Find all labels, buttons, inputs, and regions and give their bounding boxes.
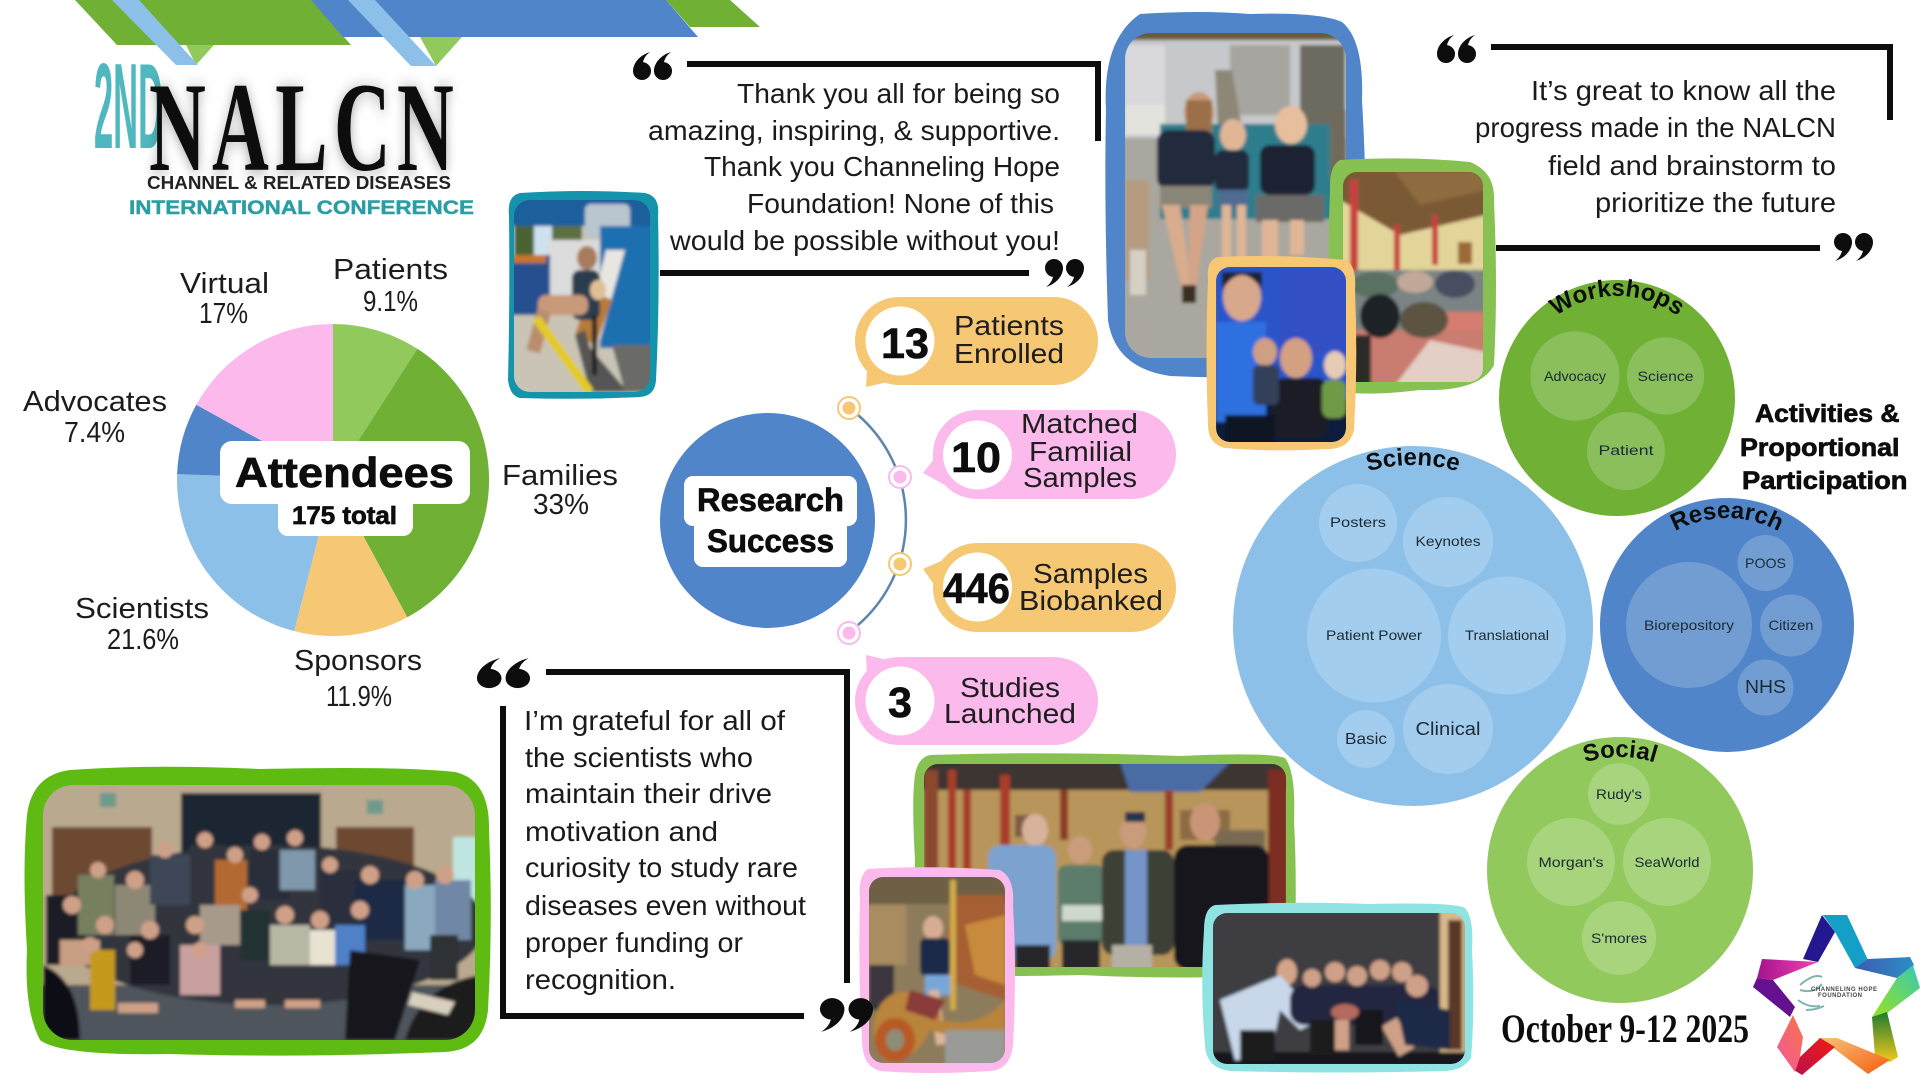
quote 3 text: proper funding or [525,927,743,958]
pie labels [23,254,618,713]
bubble: research [1600,498,1854,752]
center label: Attendees [235,449,454,496]
pie labels: Families [502,460,618,492]
photo: family at aquarium, orange frame [1206,256,1356,450]
center label: 175 total [292,502,397,530]
activities title [1740,400,1908,495]
activities title: Activities & [1755,400,1900,428]
connector arc [858,415,906,625]
science title: Science [1366,448,1459,470]
stat bubble: 10 matched familial samples: Matched [1021,408,1138,439]
research sub-bubbles: POOS [1745,555,1786,571]
quote 1 text: would be possible without you! [669,225,1060,256]
research sub-bubbles: Biorepository [1644,617,1734,633]
research sub-bubbles: Citizen [1768,617,1814,633]
photo: four scientists, green frame [913,753,1296,978]
logo: Channeling Hope Foundation star: FOUNDATION [1818,993,1862,999]
quote 3 text: I’m grateful for all of [524,705,785,736]
icon: quote 3 closing mark [820,998,873,1032]
stat bubble: 3 studies launched [855,655,1098,745]
connector nodes [837,396,912,645]
stat bubble: 13 patients enrolled [855,297,1098,387]
quote 1: thank you [633,52,1098,287]
pie labels: 17% [199,298,248,330]
photo: child in ride seat, teal frame [508,191,659,399]
quote 1 text: Thank you all for being so [737,78,1060,109]
social sub-bubbles: S'mores [1591,930,1647,946]
activities title: Proportional [1740,434,1900,462]
stat bubble: 446 samples biobanked: Biobanked [1019,585,1163,616]
quote 1 frame lines [660,64,1098,273]
science sub-bubbles: Keynotes [1416,533,1480,549]
logo wordmark: CHANNELING HOPE [1811,987,1877,993]
workshops sub-bubbles: Science [1638,368,1694,384]
science sub-bubbles: Clinical [1416,719,1480,739]
quote 3: grateful for scientists [477,658,847,1016]
photo: hands together, cyan frame [1202,903,1473,1072]
stat bubble: 13 patients enrolled: Patients [954,310,1064,341]
hub circle [660,413,875,628]
hub label [684,476,857,567]
hub label: Success [707,523,834,559]
social sub-bubbles: SeaWorld [1634,854,1700,870]
quote 3 text: the scientists who [525,742,753,773]
science sub-bubbles [1307,484,1566,774]
pie labels: 33% [533,489,589,521]
science sub-bubbles: Translational [1465,627,1549,643]
stat bubble: 13 patients enrolled: 13 [881,320,929,368]
science sub-bubbles: Basic [1345,731,1387,748]
research sub-bubbles [1626,535,1822,716]
pie labels: 7.4% [64,417,125,449]
logo: Channeling Hope Foundation star [1753,915,1920,1075]
quote 3 text: motivation and [525,816,718,847]
pie labels: Advocates [23,386,167,418]
conference logo title: 2ND [94,38,163,174]
social sub-bubbles [1527,763,1711,975]
pie labels: Patients [333,254,448,286]
social sub-bubbles: Morgan's [1538,854,1604,870]
icon: quote 1 opening mark [633,52,672,80]
NALCN wordmark: NALCN [149,57,460,198]
stat bubble: 10 matched familial samples: Samples [1023,462,1137,493]
quote 3 text: maintain their drive [525,778,772,809]
stat bubble: 13 patients enrolled: Enrolled [954,338,1064,369]
subtitle channel and related diseases: CHANNEL & RELATED DISEASES [147,173,451,193]
logo DNA mark [1798,976,1824,1010]
science sub-bubbles: Patient Power [1326,627,1422,643]
workshops sub-bubbles: Advocacy [1544,368,1606,384]
pie labels: Scientists [75,593,209,625]
research sub-bubbles: NHS [1745,677,1786,697]
social sub-bubbles: Rudy's [1596,786,1642,802]
stat bubble: 446 samples biobanked: Samples [1033,558,1148,589]
icon: quote 2 opening mark [1437,35,1476,63]
date: October 9-12 2025 [1501,1006,1749,1051]
subtitle international conference: INTERNATIONAL CONFERENCE [129,198,474,219]
icon: quote 1 closing mark [1045,259,1084,287]
quote 1 text [648,78,1060,256]
quote 2 text [1475,75,1836,218]
bubble: workshops [1499,279,1735,516]
pie labels: 9.1% [363,286,418,318]
stat bubble: 10 matched familial samples [923,408,1176,499]
bubble: social [1487,737,1753,1003]
quote 2 text: progress made in the NALCN [1475,112,1836,143]
pie labels: 11.9% [326,681,392,713]
social title: Social [1584,740,1658,762]
pie chart: attendees [177,324,489,636]
pie labels: Sponsors [294,645,422,677]
photo: child on carousel, pink frame [859,867,1015,1073]
stat bubble: 3 studies launched: 3 [888,679,912,727]
quote 2 text: field and brainstorm to [1548,150,1836,181]
center label [220,441,470,536]
stat bubble: 10 matched familial samples: Familial [1029,436,1132,467]
stat bubble: 3 studies launched: Launched [944,698,1076,729]
science sub-bubbles: Posters [1330,514,1386,530]
top decorative banner shapes [75,0,760,66]
stat bubble: 3 studies launched: Studies [960,672,1060,703]
pie labels: Virtual [180,268,269,300]
workshops sub-bubbles: Patient [1598,442,1654,458]
quote 3 text: curiosity to study rare [525,852,798,883]
workshops sub-bubbles [1530,331,1704,490]
quote 2 frame lines [1491,47,1890,248]
conference logo title [94,38,474,219]
quote 1 text: Thank you Channeling Hope [704,151,1060,182]
quote 1 text: amazing, inspiring, & supportive. [648,115,1060,146]
icon: quote 2 closing mark [1834,233,1873,261]
quote 3 text: diseases even without [525,890,806,921]
photo: carousel family, blue frame [1105,12,1366,377]
quote 3 text: recognition. [525,964,676,995]
icon: quote 3 opening mark [477,658,530,688]
research title: Research [1670,505,1782,531]
stat bubble: 10 matched familial samples: 10 [951,434,1001,482]
pie labels: 21.6% [107,624,179,656]
research success hub [660,396,912,645]
photo: banquet hall, green frame [1329,158,1496,394]
workshops title: Workshops [1548,279,1682,314]
activities title: Participation [1742,467,1908,495]
photo: conference group, bright green frame [24,767,491,1056]
quote 2 text: It’s great to know all the [1531,75,1836,106]
quote 3 text [524,705,806,995]
quote 2 text: prioritize the future [1595,187,1836,218]
quote 2: progress [1437,35,1890,261]
stat bubble: 446 samples biobanked [923,543,1176,632]
quote 1 text: Foundation! None of this [747,188,1054,219]
quote 3 frame lines [503,672,847,1016]
stat bubble: 446 samples biobanked: 446 [943,565,1010,613]
bubble: science [1233,446,1593,806]
hub label: Research [697,482,844,518]
